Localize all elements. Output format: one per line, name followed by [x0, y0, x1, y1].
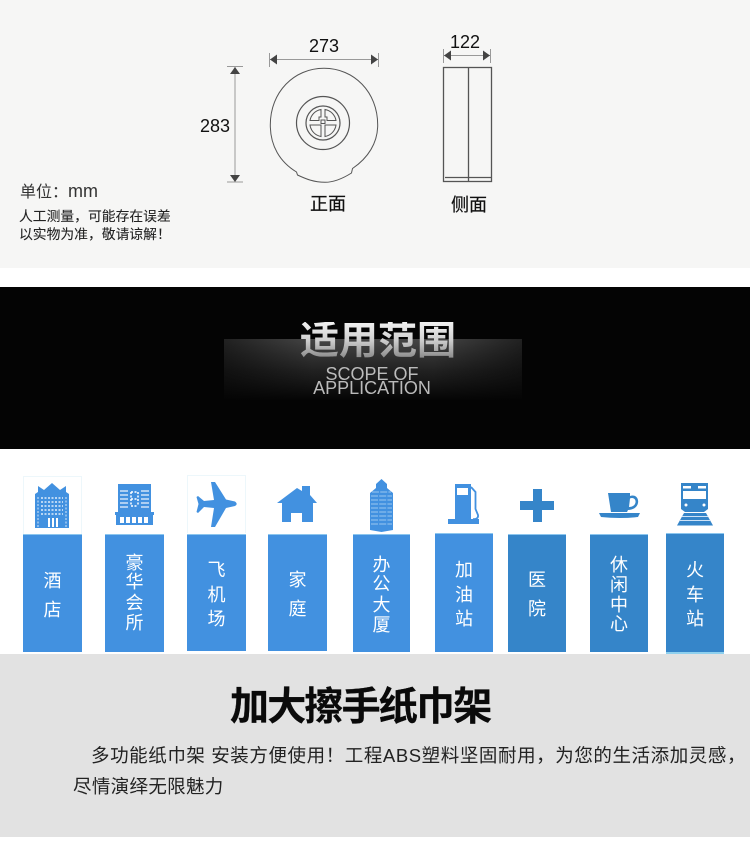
label: front view: 正面	[310, 194, 346, 214]
block: hospital label: 院	[528, 599, 546, 619]
product heading: 加大擦手纸巾架	[230, 686, 490, 729]
block: hotel label	[23, 534, 82, 652]
block: office label: 厦	[372, 615, 390, 635]
block: luxury club label	[105, 534, 164, 652]
block: luxury club label: 所	[126, 613, 144, 633]
block: leisure label: 闲	[610, 575, 628, 595]
icon: fuel pump	[448, 484, 479, 524]
label: side view: 侧面	[451, 195, 487, 215]
panel: product description	[0, 654, 750, 837]
block: airport label: 飞	[208, 560, 226, 580]
block: airport label: 场	[208, 609, 226, 629]
block: leisure label: 心	[610, 614, 628, 634]
block: hotel label: 酒	[44, 571, 62, 591]
icon: medical cross	[520, 489, 554, 522]
block: office label: 大	[372, 595, 390, 615]
block: office label: 办	[372, 555, 390, 575]
block: home label: 庭	[288, 599, 306, 619]
block: luxury club label: 豪	[126, 553, 144, 573]
product description text: 多功能纸巾架 安装方便使用！工程ABS塑料坚固耐用，为您的生活添加灵感，	[91, 745, 746, 766]
banner subtitle	[313, 364, 431, 398]
icon: airplane	[187, 475, 246, 533]
column: train station	[666, 483, 724, 654]
label: 283: 283	[200, 116, 230, 136]
block: hotel label: 店	[44, 600, 62, 620]
icon: club	[115, 484, 154, 525]
side view outline	[444, 68, 492, 182]
block: train station label: 火	[686, 560, 704, 580]
column: hotel	[23, 476, 82, 652]
block: luxury club label: 会	[126, 593, 144, 613]
block: leisure label: 中	[610, 595, 628, 615]
column: gas station	[435, 484, 493, 652]
front view outline	[270, 68, 378, 182]
panel: dimensions	[0, 0, 750, 268]
measurement note: 以实物为准，敬请谅解！	[19, 227, 171, 242]
column: home	[268, 486, 327, 651]
measurement note: 人工测量，可能存在误差	[19, 209, 171, 224]
block: home label	[268, 534, 327, 651]
column: office building	[353, 479, 410, 652]
banner subtitle: SCOPE OF	[325, 364, 418, 384]
column: luxury club	[105, 484, 164, 652]
block: airport label	[187, 534, 246, 651]
label: 273: 273	[309, 36, 339, 56]
block: leisure label	[590, 534, 648, 652]
block: hospital label: 医	[528, 570, 546, 590]
width dimension arrow 273	[270, 53, 378, 67]
block: gas station label: 加	[455, 560, 473, 580]
icon: coffee cup	[599, 493, 640, 518]
product description text	[73, 745, 746, 797]
column: hospital	[508, 489, 566, 652]
icon: hotel	[23, 476, 82, 534]
column: airport	[187, 475, 246, 651]
banner subtitle: APPLICATION	[313, 378, 431, 398]
label: 122: 122	[450, 32, 480, 52]
unit label: 单位：mm	[20, 181, 98, 201]
block: gas station label: 油	[455, 585, 473, 605]
column: leisure center	[590, 493, 648, 652]
block: hospital label	[508, 534, 566, 652]
block: luxury club label: 华	[126, 572, 144, 592]
block: airport label: 机	[208, 585, 226, 605]
block: train station label	[666, 533, 724, 654]
icon: office tower	[370, 479, 393, 532]
block: train station label: 站	[686, 609, 704, 629]
block: gas station label	[435, 533, 493, 652]
panel: scope banner	[0, 287, 750, 449]
measurement note	[19, 209, 171, 242]
panel: venue columns	[0, 449, 750, 654]
height dimension arrow 283	[227, 66, 243, 182]
banner glow	[224, 339, 522, 401]
banner title: 适用范围	[300, 320, 456, 363]
block: leisure label: 休	[610, 555, 628, 575]
diagram: front and side views with dimensions	[227, 49, 492, 183]
block: home label: 家	[288, 570, 306, 590]
product description text: 尽情演绎无限魅力	[73, 776, 224, 797]
block: office label: 公	[372, 574, 390, 594]
block: train station label: 车	[686, 585, 704, 605]
block: office label	[353, 534, 410, 652]
icon: train	[677, 483, 713, 526]
depth dimension arrow 122	[444, 49, 490, 63]
block: gas station label: 站	[455, 609, 473, 629]
icon: house	[277, 486, 317, 522]
